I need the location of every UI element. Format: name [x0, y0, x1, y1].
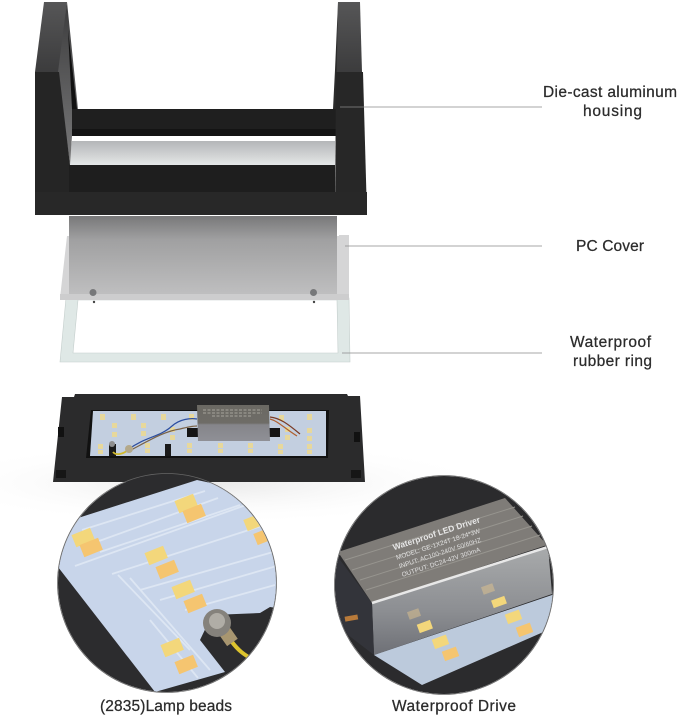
leader line: rubber ring — [342, 352, 542, 354]
circle outline: waterproof drive — [334, 476, 554, 694]
caption: lamp beads: (2835)Lamp beads — [100, 698, 232, 715]
zoom circle: waterproof drive — [335, 476, 553, 694]
right upright top face — [336, 2, 362, 72]
right upright front — [335, 72, 367, 215]
PC cover — [60, 216, 349, 303]
left inner face — [58, 2, 78, 165]
label: rubber ring: rubber ring — [573, 353, 652, 370]
driver label text: Waterproof LED Driver — [391, 514, 482, 552]
label: rubber ring — [570, 334, 652, 370]
copper wire — [345, 614, 358, 622]
label: housing: Die-cast aluminum — [543, 84, 677, 101]
mounting tabs — [58, 427, 64, 437]
ground screw — [203, 609, 238, 646]
caption: waterproof drive: Waterproof Drive — [392, 698, 516, 715]
left upright top face — [35, 2, 67, 72]
black tray — [53, 394, 365, 482]
circle outline: lamp beads — [58, 474, 276, 692]
label: housing: housing — [583, 103, 642, 120]
beads — [71, 494, 262, 657]
board notches — [109, 444, 171, 456]
label: housing — [543, 84, 677, 120]
wires — [113, 417, 300, 454]
yellow wire — [230, 641, 249, 658]
recess — [86, 410, 329, 458]
driver label text — [392, 518, 482, 576]
bottom band — [35, 192, 367, 215]
driver brackets — [187, 428, 199, 437]
die-cast aluminum housing — [35, 2, 367, 215]
driver highlight edge — [372, 547, 548, 603]
zoom circle: lamp beads — [58, 480, 276, 692]
beads — [417, 596, 522, 649]
leader line: PC cover — [345, 245, 542, 247]
PCB strip — [366, 595, 560, 685]
LED driver box — [197, 405, 270, 441]
driver dark end — [335, 553, 374, 655]
traces — [75, 491, 280, 678]
floor shadow — [0, 441, 500, 525]
leader line: housing — [340, 106, 542, 108]
PCB — [50, 480, 290, 692]
lamp beads — [98, 414, 312, 454]
driver label text: OUTPUT: DC24-42V 300mA — [401, 546, 482, 579]
driver label text: MODEL: GE-1X24T 18-24*3W — [395, 528, 482, 562]
label: PC cover: PC Cover — [576, 238, 644, 255]
driver label text: INPUT: AC100-240V 50/60HZ — [398, 537, 482, 570]
driver top face with text — [338, 498, 547, 603]
rubber ring — [60, 298, 350, 362]
driver front face — [372, 546, 552, 655]
back band — [72, 109, 336, 136]
LED module — [53, 394, 365, 482]
screw left — [90, 289, 96, 296]
window inner panel — [69, 141, 335, 165]
front band — [69, 165, 335, 192]
screw right — [310, 289, 317, 296]
circuit board — [90, 411, 326, 456]
label: rubber ring: Waterproof — [570, 334, 652, 351]
left upright front — [35, 72, 70, 192]
